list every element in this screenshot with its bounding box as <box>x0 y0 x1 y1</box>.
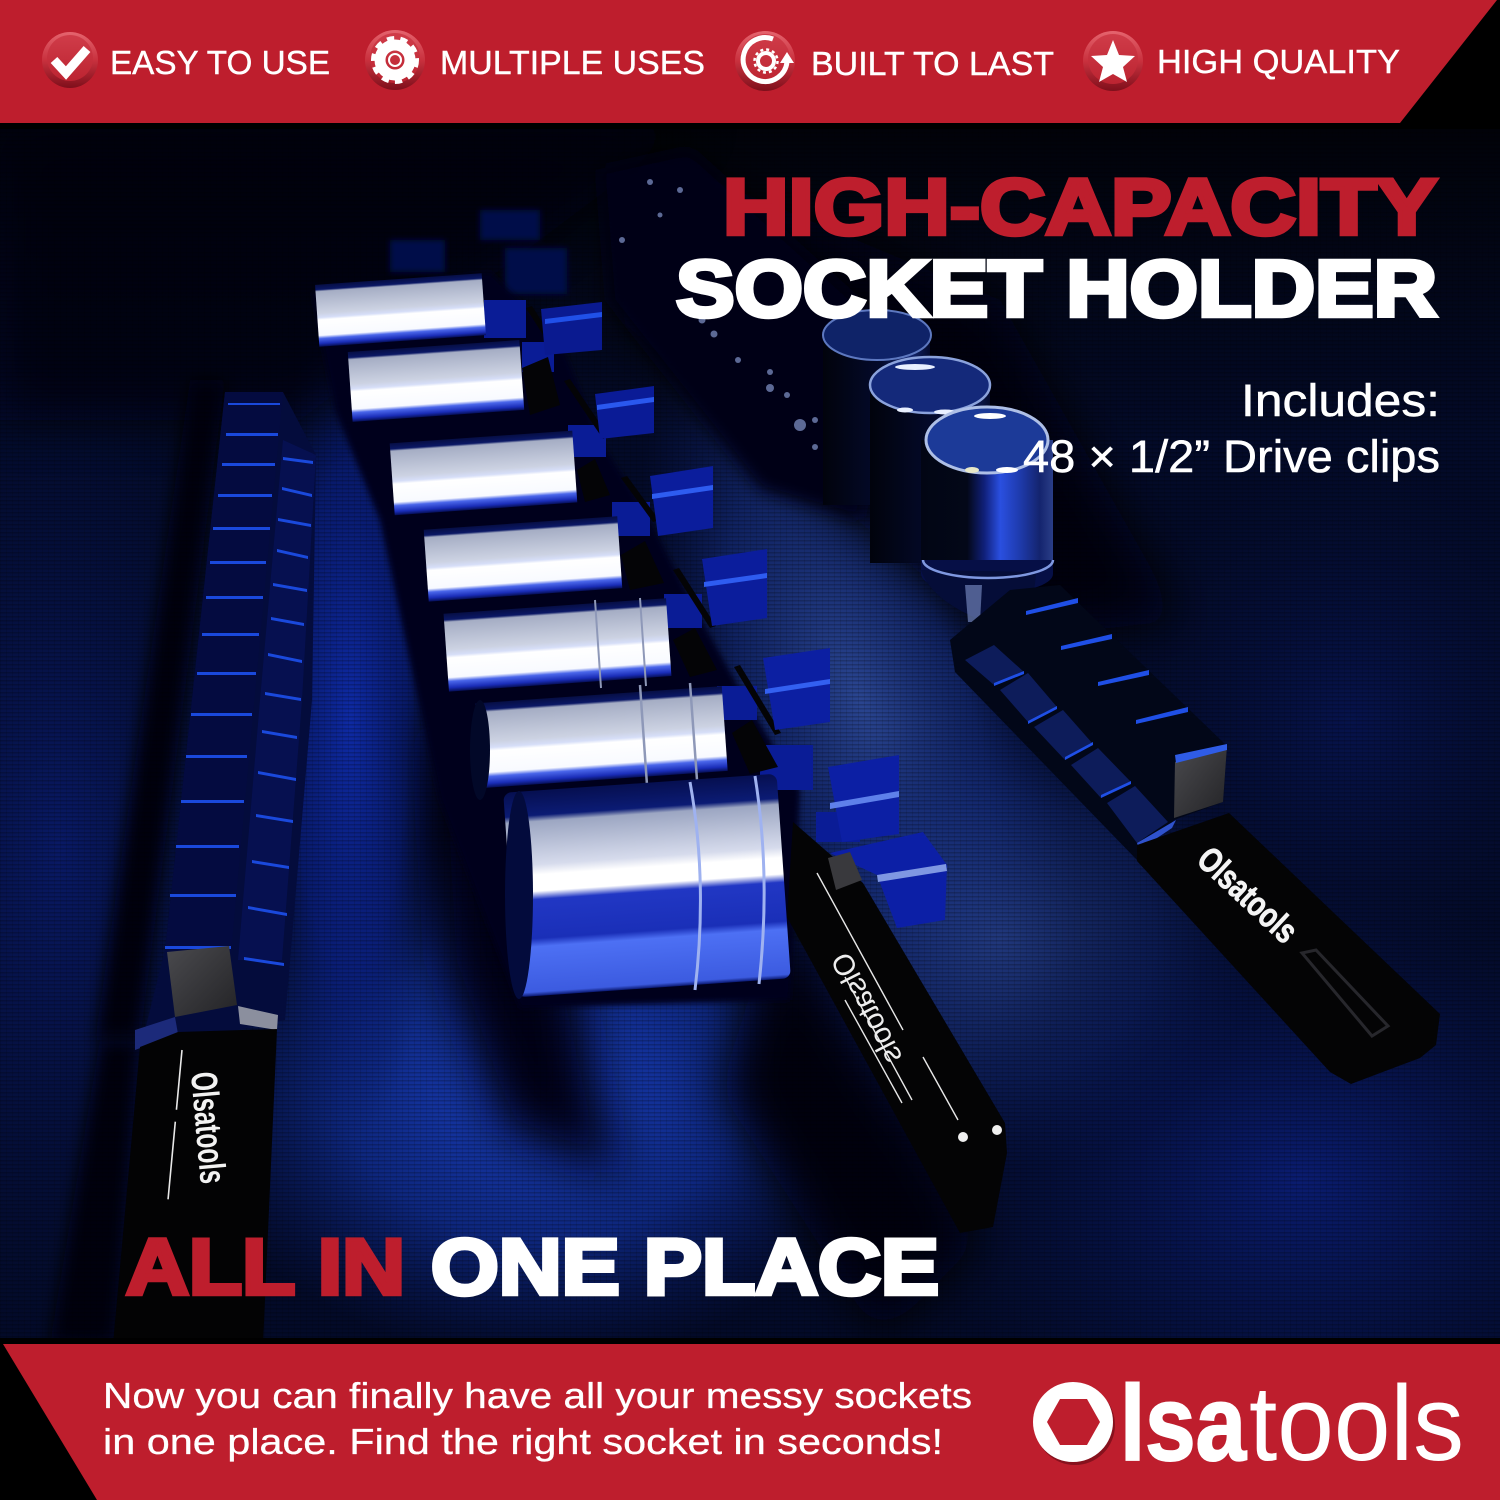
plate bolts <box>958 1125 1002 1142</box>
socket 2 <box>348 340 524 422</box>
logo: Olsatools <box>1033 1363 1464 1483</box>
left rail clip highlights <box>165 403 313 966</box>
socket 5 <box>444 598 671 692</box>
right socket rail <box>950 585 1227 860</box>
socket B <box>870 357 990 563</box>
block 5 <box>763 648 830 730</box>
left rail end plate <box>113 1029 277 1344</box>
right rail front clips <box>965 645 1168 843</box>
socket 3 <box>390 431 577 515</box>
description text: Now you can finally have all your messy sockets <box>103 1375 972 1416</box>
icon: star <box>1083 31 1143 91</box>
right standing sockets <box>823 310 1053 622</box>
top banner <box>0 0 1500 129</box>
socket 1 <box>315 273 486 347</box>
dark clip wedges <box>522 306 781 774</box>
centre rail end plate <box>787 822 1007 1233</box>
right rail end plate <box>1137 813 1440 1084</box>
dim clip blocks upper row <box>390 210 567 294</box>
icon: gear with circular arrow <box>735 31 795 91</box>
centre rail clip blocks <box>484 300 947 928</box>
left plate logo: Olsatools <box>183 1070 234 1185</box>
label: built to last: BUILT TO LAST <box>811 46 1054 83</box>
socket 4 <box>424 516 622 602</box>
block 2 <box>595 386 654 439</box>
bottom banner <box>0 1338 1500 1500</box>
icon: check mark <box>42 32 98 88</box>
far socket row in shadow <box>390 150 900 520</box>
dark backing behind socket row <box>312 272 800 1008</box>
socket C <box>823 310 931 505</box>
left socket rail <box>135 392 316 1050</box>
block 3 <box>650 466 713 536</box>
socket row <box>315 273 791 999</box>
slogan: all in one place: ONE PLACE <box>431 1222 939 1311</box>
socket A <box>921 407 1053 622</box>
logo: Olsatools: tools <box>1249 1363 1464 1483</box>
icon: gear <box>365 30 425 90</box>
title: HIGH-CAPACITY <box>723 162 1437 251</box>
label: high quality: HIGH QUALITY <box>1157 44 1400 81</box>
block 7 <box>830 832 947 928</box>
connecting clips <box>484 300 860 842</box>
block 4 <box>702 549 767 626</box>
centre plate logo: Olsatools <box>825 947 909 1069</box>
block 6 <box>828 755 899 842</box>
logo: Olsatools: lsa <box>1120 1363 1247 1483</box>
description text: in one place. Find the right socket in seconds! <box>103 1421 943 1462</box>
title <box>676 162 1437 333</box>
description text <box>103 1375 972 1462</box>
includes text <box>1023 375 1440 482</box>
socket 7 <box>503 774 791 999</box>
includes text: 48 × 1/2” Drive clips <box>1023 431 1440 482</box>
socket 6 <box>470 683 728 800</box>
slogan: all in one place: ALL IN <box>126 1222 405 1311</box>
label: multiple uses: MULTIPLE USES <box>440 45 705 82</box>
title: SOCKET HOLDER <box>676 244 1437 333</box>
includes text: Includes: <box>1241 375 1440 426</box>
slogan: all in one place <box>126 1222 939 1311</box>
right rail highlights <box>994 598 1188 798</box>
right plate logo: Olsatools <box>1190 839 1305 951</box>
label: easy to use: EASY TO USE <box>110 45 330 82</box>
block 1 <box>541 302 602 355</box>
